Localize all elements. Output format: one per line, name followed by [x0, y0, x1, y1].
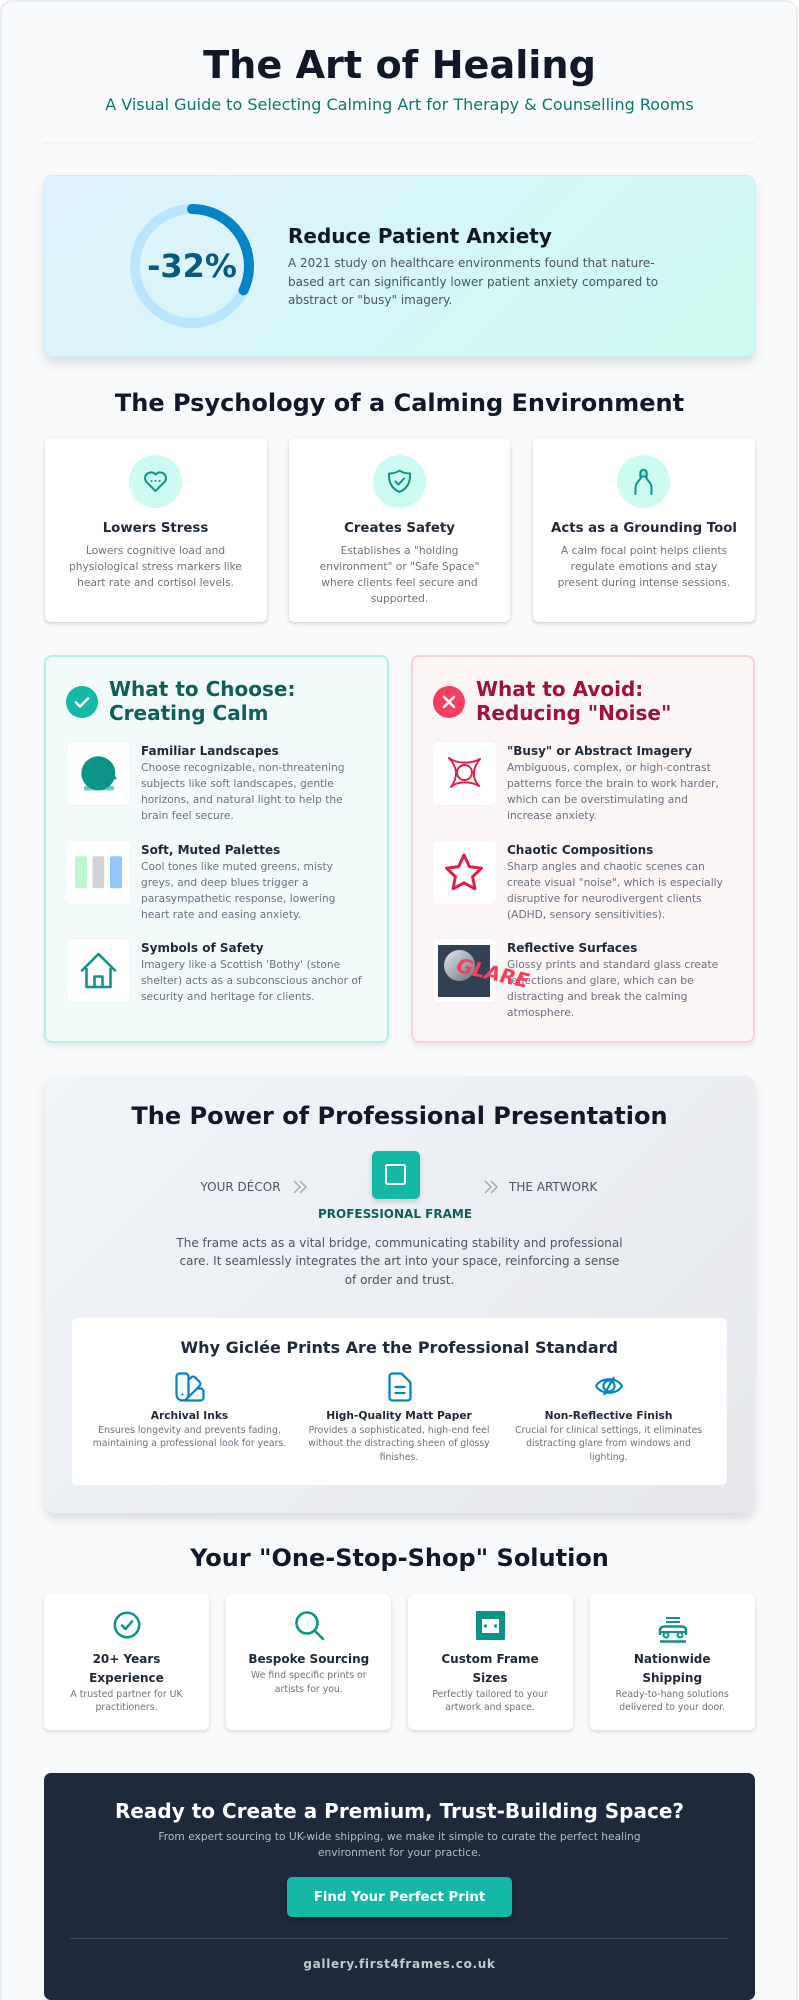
heading: psychology: The Psychology of a Calming Environment	[115, 389, 684, 417]
hero text	[288, 256, 658, 307]
presentation text: care. It seamlessly integrates the art into your space, reinforcing a sense	[180, 1254, 619, 1268]
item text: Ambiguous, complex, or high-contrast	[507, 761, 711, 774]
label: your decor: YOUR DÉCOR	[200, 1180, 281, 1194]
panel: professional presentation	[44, 1076, 754, 1513]
cta text	[44, 1829, 755, 1861]
item text: increase anxiety.	[507, 809, 597, 822]
icon: star	[433, 841, 496, 904]
panel: what to avoid	[411, 655, 755, 1043]
label: the artwork: THE ARTWORK	[509, 1180, 597, 1194]
item: muted palettes	[67, 841, 335, 921]
item text: subjects like soft landscapes, gentle	[141, 777, 334, 790]
panel heading	[476, 677, 671, 725]
panel heading: What to Choose:	[109, 677, 295, 701]
icon: paper	[388, 1372, 412, 1402]
item text	[507, 958, 718, 1019]
card title: Creates Safety	[344, 521, 455, 536]
item: busy imagery	[433, 742, 719, 822]
icon: house	[67, 939, 130, 1002]
icon: frame	[372, 1151, 420, 1199]
card title: Sizes	[472, 1671, 508, 1685]
heading: giclee: Why Giclée Prints Are the Professional Standard	[181, 1338, 618, 1357]
item text: patterns force the brain to work harder,	[507, 777, 719, 790]
card text: regulate emotions and stay	[571, 560, 717, 573]
feature text: Crucial for clinical settings, it eliminates	[515, 1425, 702, 1436]
card text: environment" or "Safe Space"	[320, 560, 479, 573]
card title	[441, 1652, 539, 1685]
item text: security and heritage for clients.	[141, 990, 315, 1003]
item: familiar landscapes	[67, 742, 344, 822]
card: experience	[44, 1594, 209, 1730]
icon: frame sizes	[476, 1611, 505, 1640]
card text: physiological stress markers like	[69, 560, 242, 573]
cta text: environment for your practice.	[318, 1846, 481, 1859]
item text: horizons, and natural light to help the	[141, 793, 343, 806]
card text: We find specific prints or	[251, 1670, 367, 1681]
card text: delivered to your door.	[619, 1702, 725, 1713]
card text	[320, 544, 479, 605]
hero text: A 2021 study on healthcare environments found that nature-	[288, 256, 655, 270]
card text: supported.	[371, 592, 428, 605]
feature text: Ensures longevity and prevents fading,	[98, 1425, 281, 1436]
card text	[251, 1670, 367, 1695]
feature text	[308, 1425, 490, 1462]
feature text: finishes.	[380, 1452, 418, 1462]
feature: non-reflective finish	[515, 1376, 702, 1462]
card text: artwork and space.	[445, 1702, 535, 1713]
card title	[89, 1652, 164, 1685]
item text: parasympathetic response, lowering	[141, 892, 335, 905]
card text	[70, 1689, 183, 1713]
icon: check circle	[114, 1612, 140, 1638]
website url: gallery.first4frames.co.uk	[303, 1957, 496, 1971]
item text: create visual "noise", which is especially	[507, 876, 723, 889]
item text: Sharp angles and chaotic scenes can	[507, 860, 705, 873]
card title: Shipping	[642, 1671, 702, 1685]
donut chart: -32%: -32%	[147, 247, 237, 285]
icon: shield	[373, 454, 426, 508]
item text: Choose recognizable, non-threatening	[141, 761, 344, 774]
icon: heart	[128, 454, 182, 508]
item title: Soft, Muted Palettes	[141, 843, 280, 857]
item text	[141, 958, 362, 1003]
card: grounding tool	[533, 438, 755, 622]
item text	[141, 860, 335, 921]
card text: Ready-to-hang solutions	[616, 1689, 729, 1700]
heading: one-stop-shop: Your "One-Stop-Shop" Solution	[190, 1544, 609, 1572]
card text: practitioners.	[95, 1702, 158, 1713]
item text: shelter) acts as a subconscious anchor of	[141, 974, 362, 987]
card title: Lowers Stress	[103, 521, 208, 536]
card text	[590, 1688, 755, 1715]
item: reflective surfaces	[433, 939, 718, 1019]
card text: artists for you.	[275, 1684, 343, 1695]
card title: Experience	[89, 1671, 164, 1685]
item title: Reflective Surfaces	[507, 941, 637, 955]
card: bespoke sourcing	[226, 1594, 391, 1730]
icon: delivery van	[658, 1616, 688, 1642]
icon: check badge	[66, 686, 98, 718]
panel heading: Creating Calm	[109, 701, 268, 725]
cta button: Find Your Perfect Print	[314, 1890, 485, 1905]
label: professional frame: PROFESSIONAL FRAME	[318, 1207, 472, 1221]
hero heading: Reduce Patient Anxiety	[288, 224, 552, 248]
item title: Chaotic Compositions	[507, 843, 653, 857]
item: symbols of safety	[67, 939, 362, 1003]
card: lowers stress	[44, 438, 266, 622]
item title: "Busy" or Abstract Imagery	[507, 744, 692, 758]
presentation text: of order and trust.	[345, 1273, 454, 1287]
item text	[141, 761, 344, 822]
panel heading: What to Avoid:	[476, 677, 643, 701]
item text	[507, 860, 723, 921]
feature title: Non-Reflective Finish	[545, 1409, 672, 1422]
card: creates safety	[289, 438, 510, 622]
feature: matt paper	[308, 1372, 490, 1462]
item text: atmosphere.	[507, 1006, 574, 1019]
icon: grounding figure	[617, 454, 670, 508]
cta heading: Ready to Create a Premium, Trust-Building Space?	[115, 1799, 684, 1823]
card title: Nationwide	[634, 1652, 711, 1666]
heading: presentation: The Power of Professional Presentation	[131, 1102, 668, 1130]
panel: call to action	[44, 1773, 755, 2000]
icon: landscape	[67, 742, 130, 805]
item: chaotic compositions	[433, 841, 723, 921]
item text: distracting and break the calming	[507, 990, 687, 1003]
item text: brain feel secure.	[141, 809, 234, 822]
card text: Perfectly tailored to your	[432, 1689, 548, 1700]
subtitle: A Visual Guide to Selecting Calming Art for Therapy & Counselling Rooms	[105, 95, 694, 114]
feature: archival inks	[93, 1372, 286, 1449]
card text	[408, 1688, 572, 1715]
card: nationwide shipping	[590, 1594, 755, 1730]
feature text: Provides a sophisticated, high-end feel	[309, 1425, 489, 1436]
glare label: GLARE	[454, 953, 531, 993]
item text: Imagery like a Scottish 'Bothy' (stone	[141, 958, 340, 971]
card title	[590, 1650, 755, 1687]
card text: Establishes a "holding	[341, 544, 458, 557]
card text: A trusted partner for UK	[70, 1689, 183, 1700]
panel heading: Reducing "Noise"	[476, 701, 671, 725]
item text: (ADHD, sensory sensitivities).	[507, 908, 665, 921]
item text: Cool tones like muted greens, misty	[141, 860, 333, 873]
feature text: distracting glare from windows and	[526, 1438, 691, 1449]
arrow: right chevrons	[484, 1180, 498, 1194]
icon: cross badge	[433, 686, 465, 718]
title: The Art of Healing	[203, 44, 596, 88]
item text: reflections and glare, which can be	[507, 974, 694, 987]
card text: where clients feel secure and	[321, 576, 478, 589]
card title: Custom Frame	[441, 1652, 539, 1666]
presentation text	[176, 1236, 623, 1287]
item text: which can be overstimulating and	[507, 793, 688, 806]
item title: Symbols of Safety	[141, 941, 264, 955]
feature text	[515, 1425, 702, 1462]
icon: swatch	[175, 1372, 205, 1402]
hero text: abstract or "busy" imagery.	[288, 293, 452, 307]
cta text: From expert sourcing to UK-wide shipping, we make it simple to curate the perfect healing	[158, 1830, 641, 1843]
arrow: left chevrons	[294, 1180, 307, 1194]
card title: 20+ Years	[93, 1652, 160, 1666]
feature title: High-Quality Matt Paper	[326, 1409, 472, 1422]
item text: heart rate and easing anxiety.	[141, 908, 301, 921]
card text	[69, 544, 242, 589]
donut chart: -32%	[130, 204, 254, 328]
item text	[507, 761, 719, 822]
card text	[558, 544, 730, 589]
icon: glare artwork	[433, 939, 496, 1002]
feature text: maintaining a professional look for years.	[93, 1438, 286, 1449]
icon: magnifier	[295, 1611, 324, 1640]
feature title: Archival Inks	[151, 1409, 228, 1422]
item title: Familiar Landscapes	[141, 744, 279, 758]
panel: what to choose	[44, 655, 389, 1043]
feature text: without the distracting sheen of glossy	[308, 1438, 490, 1449]
icon: no glare eye	[595, 1376, 623, 1396]
card text: present during intense sessions.	[558, 576, 730, 589]
card title: Bespoke Sourcing	[248, 1652, 369, 1666]
item text: greys, and deep blues trigger a	[141, 876, 308, 889]
panel: giclee prints	[72, 1318, 726, 1485]
icon: abstract pattern	[433, 742, 496, 805]
item text: Glossy prints and standard glass create	[507, 958, 718, 971]
card text: A calm focal point helps clients	[561, 544, 727, 557]
icon: palette swatches	[67, 841, 130, 904]
item text: disruptive for neurodivergent clients	[507, 892, 702, 905]
presentation text: The frame acts as a vital bridge, communicating stability and professional	[176, 1236, 623, 1250]
card: custom frame sizes	[408, 1594, 572, 1730]
panel heading	[109, 677, 295, 725]
card text: heart rate and cortisol levels.	[77, 576, 234, 589]
feature text: lighting.	[589, 1452, 628, 1462]
panel: anxiety statistic hero	[44, 175, 755, 357]
feature text	[93, 1425, 286, 1449]
hero text: based art can significantly lower patient anxiety compared to	[288, 275, 658, 289]
cta button	[287, 1877, 512, 1917]
card text: Lowers cognitive load and	[86, 544, 225, 557]
card title: Acts as a Grounding Tool	[551, 521, 737, 536]
